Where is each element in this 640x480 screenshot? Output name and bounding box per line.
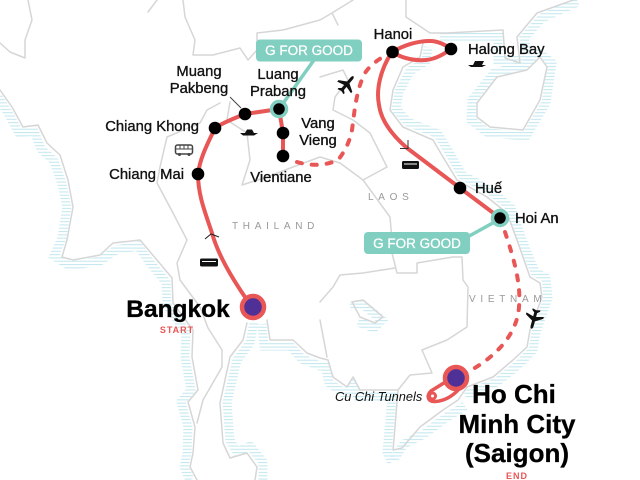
route: overland <box>198 41 500 307</box>
label: Hue: Huế <box>475 181 503 197</box>
stop: Vientiane <box>277 150 289 162</box>
label: Muang Pakbeng: Muang <box>176 64 222 80</box>
stop: Vang Vieng <box>277 127 289 139</box>
stop: Hoi An <box>492 210 508 226</box>
arrow: route north Thailand <box>205 234 219 239</box>
arrow: route north Vietnam <box>400 140 408 148</box>
icon: plane south <box>523 307 545 331</box>
icon: bus north <box>176 145 192 156</box>
badge: G for Good south <box>364 232 470 254</box>
label: Ho Chi Minh City (Saigon): Ho Chi <box>472 379 556 409</box>
badge: G for Good south: G FOR GOOD <box>373 236 461 251</box>
badge: G for Good north <box>256 40 362 62</box>
stop: Chiang Mai <box>192 168 204 180</box>
label: Thailand: THAILAND <box>232 221 319 232</box>
stop: Hanoi <box>386 46 399 58</box>
label: Luang Prabang: Prabang <box>250 84 306 100</box>
stop: Muang Pakbeng <box>239 108 251 120</box>
label: Muang Pakbeng: Pakbeng <box>170 81 228 97</box>
stop: Cu Chi Tunnels <box>430 393 436 399</box>
label: Cu Chi Tunnels: Cu Chi Tunnels <box>335 389 423 404</box>
label: Chiang Khong: Chiang Khong <box>105 119 199 135</box>
connector: G for Good Luang Prabang <box>279 60 314 109</box>
icon: boat Mekong <box>240 130 258 136</box>
label: Ho Chi Minh City (Saigon): Minh City <box>458 409 576 439</box>
label: Vientiane: Vientiane <box>250 170 312 186</box>
icon: bus Thailand <box>200 258 218 266</box>
icon: bus Vietnam <box>402 161 419 169</box>
label: Vang Vieng: Vang <box>301 116 335 132</box>
label: Halong Bay: Halong Bay <box>468 42 545 58</box>
label: Hoi An: Hoi An <box>515 211 559 227</box>
label: Ho Chi Minh City (Saigon): (Saigon) <box>465 438 569 468</box>
connector: Muang Pakbeng leader line <box>230 97 241 108</box>
icon: boat Halong <box>468 61 486 67</box>
stop: Luang Prabang <box>272 102 286 116</box>
icon: plane north <box>334 71 360 97</box>
label: Hanoi: Hanoi <box>374 27 412 43</box>
stop: Bangkok start <box>242 296 264 318</box>
connector: G for Good Hoi An <box>462 219 500 240</box>
route: Cu Chi Tunnels loop <box>428 381 460 402</box>
stop: Ho Chi Minh City end <box>445 367 467 389</box>
label: Vang Vieng: Vieng <box>299 133 337 149</box>
label: Vietnam: VIETNAM <box>469 294 546 305</box>
label: Luang Prabang: Luang <box>257 67 299 83</box>
stop: Halong Bay <box>445 43 457 55</box>
stop: Hue <box>454 182 466 194</box>
route: flights <box>297 52 519 378</box>
label: Laos: LAOS <box>368 192 413 203</box>
label: start: START <box>160 325 194 335</box>
stop: Chiang Khong <box>209 122 221 134</box>
badge: G for Good north: G FOR GOOD <box>265 43 353 58</box>
label: Bangkok: Bangkok <box>126 296 230 323</box>
label: Chiang Mai: Chiang Mai <box>109 167 184 183</box>
